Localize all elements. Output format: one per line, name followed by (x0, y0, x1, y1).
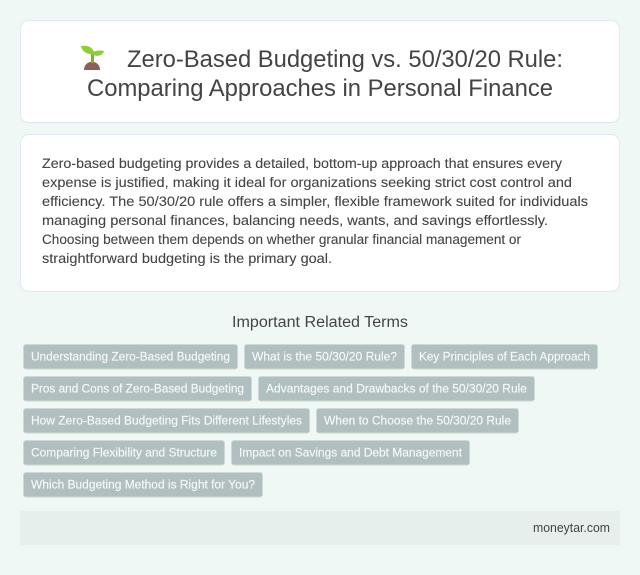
tag: Which Budgeting Method is Right for You? (31, 478, 255, 492)
tag (232, 440, 470, 465)
summary text: managing personal finances, balancing needs, wants, and savings effortlessly. (42, 213, 548, 229)
tag: Understanding Zero-Based Budgeting (31, 350, 230, 364)
tag: Impact on Savings and Debt Management (239, 446, 463, 460)
tag: How Zero-Based Budgeting Fits Different Lifestyles (31, 414, 302, 428)
tag (258, 376, 534, 401)
tag (24, 408, 310, 433)
summary text: straightforward budgeting is the primary goal. (42, 251, 332, 267)
tag (24, 376, 252, 401)
tag: Comparing Flexibility and Structure (31, 446, 217, 460)
summary text: efficiency. The 50/30/20 rule offers a simpler, flexible framework suited for individuals (42, 194, 588, 210)
tag list (24, 344, 598, 497)
tag: What is the 50/30/20 Rule? (252, 350, 397, 364)
summary text: Zero-based budgeting provides a detailed, bottom-up approach that ensures every (42, 156, 563, 172)
summary text: Choosing between them depends on whether granular financial management or (42, 232, 521, 248)
footer: site name: moneytar.com (533, 521, 610, 535)
tag (24, 472, 262, 497)
icon: seedling (81, 46, 104, 70)
title: Comparing Approaches in Personal Finance (87, 75, 553, 102)
panel: title card (20, 20, 620, 122)
tag (316, 408, 518, 433)
title: Zero-Based Budgeting vs. 50/30/20 Rule: (127, 46, 563, 73)
tag: Pros and Cons of Zero-Based Budgeting (31, 382, 244, 396)
tag: When to Choose the 50/30/20 Rule (324, 414, 511, 428)
title (87, 46, 563, 102)
panel: summary card (20, 134, 620, 292)
tag (244, 344, 404, 369)
tag (24, 440, 224, 465)
footer (20, 511, 620, 545)
tag: Advantages and Drawbacks of the 50/30/20 Rule (266, 382, 527, 396)
summary text (42, 156, 588, 267)
tag (412, 344, 598, 369)
heading: related terms: Important Related Terms (232, 314, 408, 331)
tag: Key Principles of Each Approach (419, 350, 590, 364)
tag (24, 344, 238, 369)
summary text: expense is justified, making it ideal for organizations seeking strict cost control and (42, 175, 572, 191)
